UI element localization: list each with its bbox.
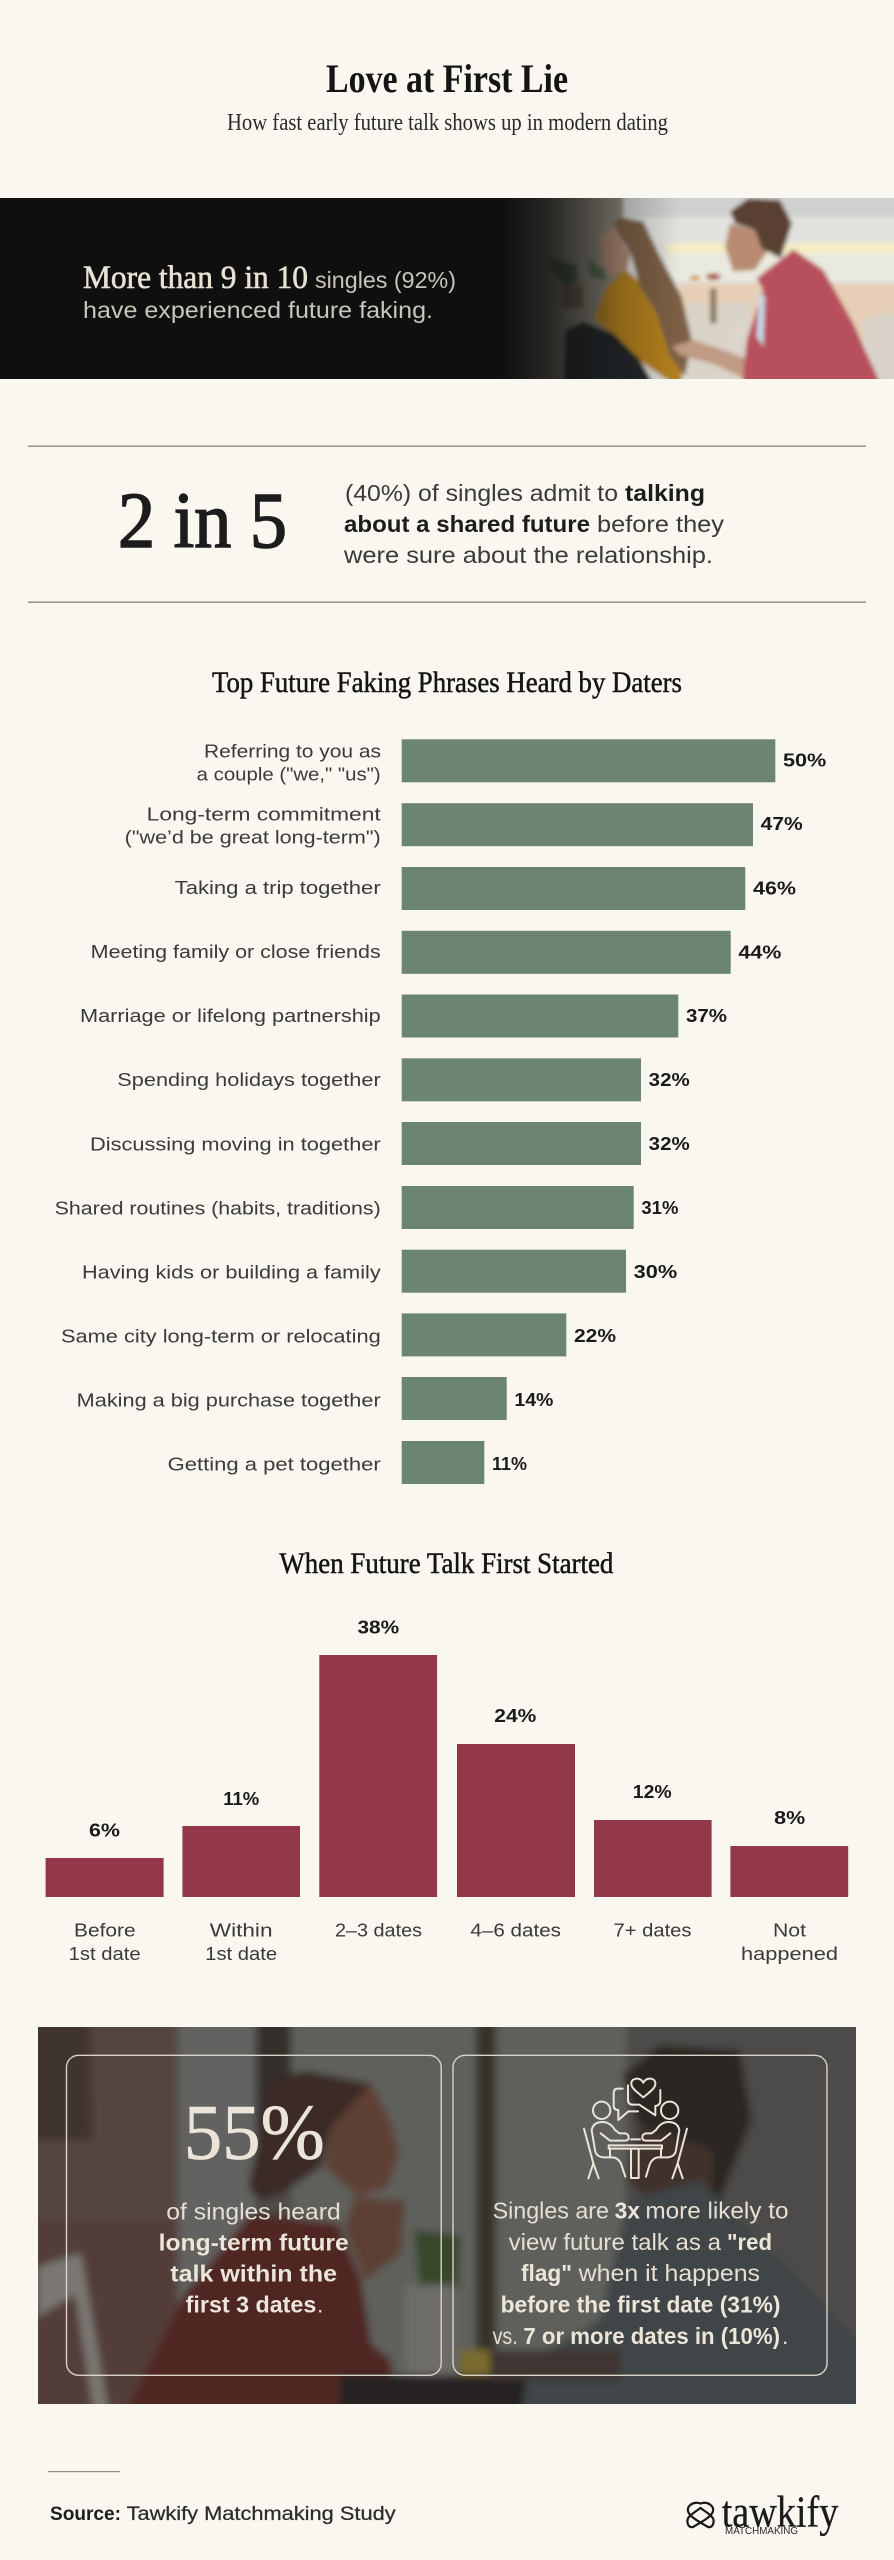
stat description: were sure about the relationship. <box>343 542 713 568</box>
panel photo: couple at table <box>38 2027 856 2404</box>
bar: long-term commitment: 47% <box>761 813 803 834</box>
source line: Tawkify Matchmaking Study <box>127 2504 396 2525</box>
bar: discussing moving in together: 32% <box>649 1133 690 1154</box>
bar: getting a pet together: Getting a pet together <box>168 1454 381 1474</box>
bar: marriage or lifelong partnership: 37% <box>686 1005 727 1026</box>
bar: shared routines: 31% <box>641 1197 678 1218</box>
column: within 1st date: 1st date <box>205 1943 277 1964</box>
bar: referring to you as a couple: a couple ("we," "us") <box>197 763 381 784</box>
stat description: talking <box>625 480 705 506</box>
bar: getting a pet together <box>168 1441 527 1484</box>
subtitle: How fast early future talk shows up in modern dating <box>227 110 668 136</box>
big number: 55%: 55% <box>184 2089 325 2176</box>
column: 4-6 dates <box>457 1705 575 1941</box>
callout text: red flag comparison <box>493 2198 788 2349</box>
icon: knot mark <box>687 2503 714 2527</box>
stat description: before they <box>597 511 725 537</box>
bar: having kids or building a family: 30% <box>634 1261 677 1282</box>
callout text: long-term talk: first 3 dates <box>186 2292 316 2318</box>
column: not happened: 8% <box>774 1807 805 1828</box>
column: before 1st date: Before <box>74 1920 136 1941</box>
column: 2-3 dates: 2–3 dates <box>335 1920 422 1941</box>
bar: making a big purchase together: Making a big purchase together <box>77 1390 381 1410</box>
bar: discussing moving in together <box>90 1122 690 1165</box>
callout text: red flag comparison: 7 or more dates in (10%) <box>523 2323 780 2349</box>
callout box: 55 percent <box>66 2055 441 2375</box>
bar: spending holidays together <box>117 1058 690 1101</box>
banner headline: More than 9 in 10 <box>83 260 308 296</box>
callout text: long-term talk: talk within the <box>170 2260 337 2286</box>
callout text: red flag comparison: Singles are <box>493 2198 609 2224</box>
callout box: 3x red flag <box>453 2055 827 2375</box>
bar: spending holidays together: 32% <box>649 1069 690 1090</box>
bar: same city long-term or relocating: 22% <box>574 1325 616 1346</box>
logo: tawkify matchmaking: tawkify <box>722 2488 838 2537</box>
bar: taking a trip together <box>175 867 796 910</box>
column: not happened: Not <box>773 1920 806 1941</box>
column: 7+ dates: 7+ dates <box>614 1920 692 1941</box>
column: not happened: happened <box>741 1943 838 1964</box>
callout text: red flag comparison: . <box>782 2323 788 2349</box>
bar: long-term commitment <box>125 803 803 847</box>
column: 2-3 dates: 38% <box>358 1616 399 1637</box>
bar: same city long-term or relocating: Same city long-term or relocating <box>61 1326 381 1346</box>
column: 7+ dates: 12% <box>633 1781 672 1802</box>
bar: taking a trip together: 46% <box>753 878 796 898</box>
banner: more than 9 in 10 <box>0 198 894 379</box>
bar: getting a pet together: 11% <box>492 1453 527 1474</box>
stat description: about a shared future <box>344 511 590 537</box>
callout text: red flag comparison: "red <box>727 2229 772 2255</box>
bar: shared routines <box>55 1186 678 1229</box>
column: before 1st date: 1st date <box>69 1943 141 1964</box>
bar: meeting family or close friends <box>91 931 781 974</box>
callout text: red flag comparison: when it happens <box>578 2260 760 2286</box>
bar: same city long-term or relocating <box>61 1313 616 1356</box>
bar: making a big purchase together <box>77 1377 553 1420</box>
bar: meeting family or close friends: Meeting family or close friends <box>91 941 381 962</box>
callout text: red flag comparison: more likely to <box>645 2198 788 2224</box>
callout text: long-term talk <box>159 2198 349 2318</box>
column: before 1st date <box>46 1820 164 1964</box>
bar: long-term commitment: Long-term commitment <box>147 804 381 825</box>
heading: top future faking phrases: Top Future Faking Phrases Heard by Daters <box>212 666 682 699</box>
bar: referring to you as a couple <box>197 739 826 784</box>
logo: tawkify matchmaking <box>687 2488 838 2537</box>
bar: discussing moving in together: Discussing moving in together <box>90 1134 381 1154</box>
banner text: second line: have experienced future faking. <box>83 297 433 323</box>
bar: making a big purchase together: 14% <box>514 1389 553 1410</box>
column: 4-6 dates: 4–6 dates <box>470 1920 561 1941</box>
callout text: long-term talk: long-term future <box>159 2229 349 2255</box>
bar: marriage or lifelong partnership <box>80 994 727 1038</box>
banner text: singles: singles (92%) <box>315 267 456 293</box>
callout text: long-term talk: of singles heard <box>166 2198 341 2224</box>
panel: key takeaways over photo <box>38 2027 856 2404</box>
callout text: red flag comparison: 3x <box>615 2198 640 2224</box>
stat description: (40%) of singles admit to <box>345 480 618 506</box>
column: not happened <box>730 1807 848 1964</box>
stat description <box>343 480 725 568</box>
column: before 1st date: 6% <box>89 1820 120 1841</box>
source line <box>50 2504 396 2525</box>
bar: having kids or building a family: Having kids or building a family <box>82 1262 382 1282</box>
icon: couple at table with heart bubble <box>584 2079 687 2178</box>
stat: 2 in 5: 2 in 5 <box>118 478 287 565</box>
column: within 1st date: 11% <box>223 1788 259 1809</box>
bar: having kids or building a family <box>82 1250 677 1293</box>
column chart: timing <box>46 1616 848 1964</box>
bar: referring to you as a couple: Referring to you as <box>204 741 381 762</box>
source line: Source: <box>50 2504 121 2525</box>
banner photo: arguing couple <box>516 198 894 379</box>
bar: taking a trip together: Taking a trip together <box>175 877 381 898</box>
callout text: red flag comparison: before the first date (31%) <box>501 2292 780 2318</box>
bar: shared routines: Shared routines (habits, traditions) <box>55 1198 381 1218</box>
title: Love at First Lie <box>326 56 568 101</box>
bar: referring to you as a couple: 50% <box>783 749 826 770</box>
logo: tawkify matchmaking: MATCHMAKING <box>725 2525 798 2537</box>
bar: spending holidays together: Spending holidays together <box>117 1069 381 1090</box>
callout text: red flag comparison: view future talk as a <box>509 2229 721 2255</box>
column: within 1st date: Within <box>210 1920 272 1941</box>
column: 2-3 dates <box>319 1616 437 1941</box>
bar: meeting family or close friends: 44% <box>738 941 781 962</box>
bar: marriage or lifelong partnership: Marriage or lifelong partnership <box>80 1005 381 1026</box>
callout text: long-term talk: . <box>317 2292 323 2318</box>
bar chart: phrases <box>55 739 826 1484</box>
heading: when future talk first started: When Future Talk First Started <box>279 1547 613 1580</box>
bar: long-term commitment: ("we’d be great long-term") <box>125 826 381 847</box>
column: 4-6 dates: 24% <box>494 1705 536 1726</box>
column: 7+ dates <box>594 1781 712 1941</box>
callout text: red flag comparison: flag" <box>521 2260 572 2286</box>
column: within 1st date <box>182 1788 300 1964</box>
callout text: red flag comparison: vs. <box>493 2323 518 2349</box>
